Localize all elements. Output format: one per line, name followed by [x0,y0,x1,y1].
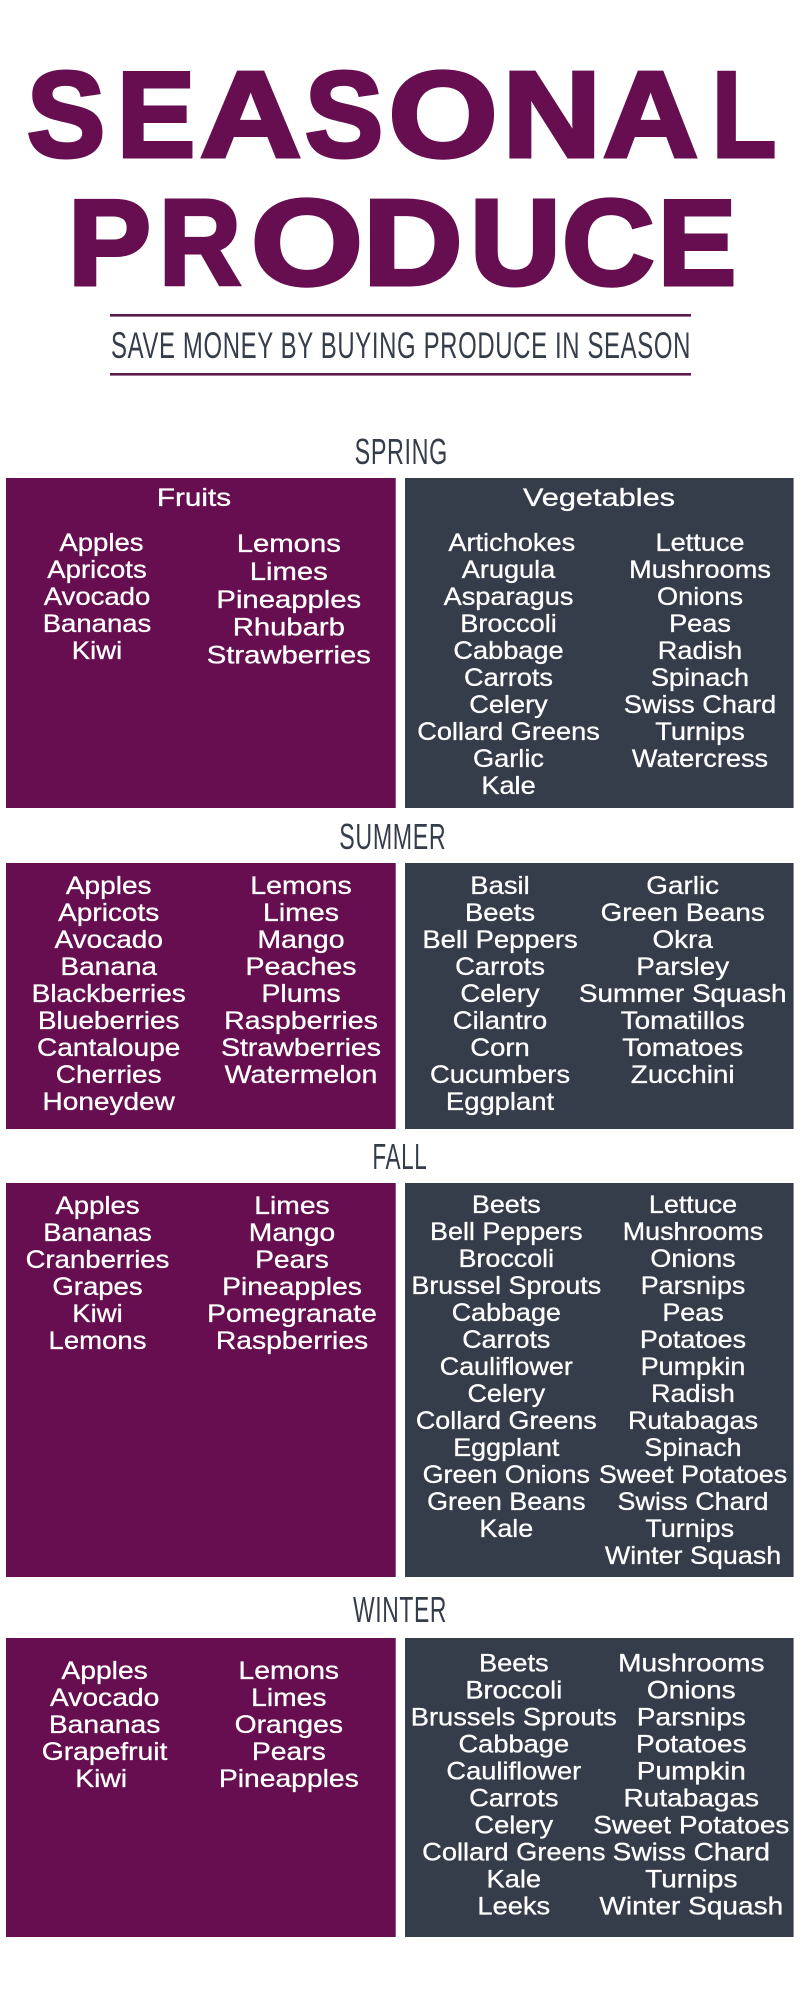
panel: fall fruits [6,1183,396,1577]
title: E [658,175,736,311]
panel: fall vegetables: Mushrooms [623,1219,763,1246]
panel: spring vegetables: Garlic [473,744,544,773]
panel: spring vegetables: Peas [669,609,731,638]
panel: fall vegetables: Eggplant [453,1435,559,1462]
panel: summer fruits: Honeydew [43,1088,176,1116]
panel: spring fruits: Bananas [43,609,151,638]
panel: spring vegetables: Mushrooms [629,555,771,584]
panel: fall vegetables: Parsnips [641,1273,745,1300]
panel: winter fruits: Bananas [49,1711,160,1739]
panel: fall vegetables: Potatoes [640,1327,746,1354]
panel: summer vegetables: Tomatillos [621,1006,745,1035]
panel: fall fruits: Pineapples [222,1273,362,1301]
panel: spring vegetables: Collard Greens [417,717,600,746]
panel: winter fruits: Pears [252,1738,326,1766]
panel: winter vegetables: Pumpkin [637,1757,746,1785]
heading: summer: SUMMER [339,816,446,857]
panel: summer fruits: Cherries [56,1061,162,1089]
panel: summer fruits: Mango [257,926,345,954]
title: O [388,46,498,182]
heading: spring: SPRING [355,431,448,472]
panel: fall vegetables: Rutabagas [628,1408,758,1435]
panel: winter vegetables: Potatoes [636,1730,747,1758]
panel: summer vegetables: Summer Squash [579,979,787,1008]
panel: fall fruits: Bananas [43,1218,152,1247]
panel: winter vegetables: Leeks [477,1892,550,1920]
panel: summer fruits: Avocado [54,926,163,954]
panel: spring vegetables: Asparagus [444,582,573,611]
panel: winter fruits: Limes [251,1684,326,1712]
panel: winter vegetables: Cabbage [458,1730,569,1758]
panel: winter fruits: Kiwi [75,1765,127,1793]
panel: winter vegetables: Celery [474,1811,553,1839]
title [27,46,776,311]
title: D [363,174,463,311]
panel: summer vegetables: Parsley [636,952,730,981]
title: L [712,47,776,183]
panel: spring fruits: Fruits [157,483,231,511]
panel: summer vegetables: Beets [465,898,535,927]
title: P [68,175,151,311]
title: U [470,175,561,311]
panel: spring fruits: Kiwi [72,636,122,665]
panel: fall fruits: Cranberries [26,1245,169,1274]
panel: fall fruits: Grapes [52,1272,143,1301]
panel: summer vegetables: Basil [470,871,530,900]
panel: winter fruits: Pineapples [219,1765,359,1793]
panel: winter vegetables: Kale [487,1865,541,1893]
panel: spring vegetables: Swiss Chard [624,690,776,719]
panel: summer vegetables: Carrots [455,952,545,981]
panel: fall vegetables: Radish [651,1381,735,1408]
panel: fall vegetables: Broccoli [458,1246,554,1273]
panel: fall vegetables: Bell Peppers [430,1219,583,1246]
title: O [251,175,363,311]
panel: winter fruits: Apples [61,1657,148,1685]
panel: spring fruits: Limes [250,557,328,585]
panel: summer vegetables: Zucchini [631,1060,735,1089]
panel: fall vegetables: Green Beans [427,1489,586,1516]
panel: fall vegetables: Peas [662,1300,724,1327]
panel: winter vegetables: Sweet Potatoes [593,1811,789,1839]
panel: winter vegetables: Rutabagas [624,1784,759,1812]
panel: fall vegetables: Pumpkin [641,1354,745,1381]
panel: fall vegetables: Spinach [644,1435,742,1462]
heading: fall: FALL [372,1136,427,1177]
panel: winter vegetables: Swiss Chard [613,1838,770,1866]
panel: summer fruits: Limes [263,899,339,927]
panel: winter vegetables: Winter Squash [599,1892,783,1920]
panel: spring vegetables: Kale [481,771,536,800]
panel: fall vegetables: Kale [479,1516,533,1543]
title: C [562,174,655,311]
panel: fall vegetables: Collard Greens [416,1408,597,1435]
panel: summer fruits: Peaches [246,953,356,981]
panel: spring vegetables [405,478,794,808]
panel: spring vegetables: Artichokes [448,528,575,557]
panel: spring vegetables: Watercress [632,744,768,773]
panel: fall vegetables: Winter Squash [605,1543,781,1570]
panel: summer vegetables: Green Beans [601,898,765,927]
panel: summer fruits: Raspberries [224,1007,378,1035]
panel: fall vegetables: Carrots [462,1327,550,1354]
title: E [117,47,195,183]
panel: fall fruits: Limes [254,1192,330,1220]
panel: fall vegetables: Cauliflower [440,1354,573,1381]
panel: spring vegetables: Onions [657,582,743,611]
panel: summer fruits: Blueberries [38,1007,180,1035]
panel: summer vegetables: Corn [470,1033,530,1062]
panel: summer vegetables: Cilantro [453,1006,547,1035]
panel: spring vegetables: Broccoli [460,609,557,638]
panel: winter vegetables [405,1638,794,1937]
panel: spring vegetables: Spinach [651,663,749,692]
panel: spring vegetables: Carrots [464,663,553,692]
panel: winter vegetables: Parsnips [637,1703,746,1731]
panel: summer fruits: Apples [66,872,152,900]
panel: fall vegetables: Onions [650,1246,736,1273]
panel: winter vegetables: Cauliflower [446,1757,582,1785]
panel: winter vegetables: Broccoli [465,1676,562,1704]
panel: fall vegetables: Celery [467,1381,545,1408]
panel: summer fruits: Plums [261,980,341,1008]
panel: summer fruits: Watermelon [225,1061,377,1089]
panel: spring vegetables: Turnips [655,717,745,746]
heading: winter: WINTER [353,1589,447,1630]
panel: spring fruits: Lemons [237,529,341,557]
title: A [200,46,301,182]
panel: fall vegetables: Lettuce [649,1192,737,1219]
panel: summer vegetables: Garlic [646,871,719,900]
title: A [603,46,698,182]
panel: fall fruits: Kiwi [72,1299,123,1328]
panel: spring vegetables: Vegetables [523,484,675,511]
panel: summer fruits: Apricots [58,899,159,927]
panel: summer vegetables: Bell Peppers [422,925,578,954]
panel: winter fruits: Avocado [50,1684,159,1712]
panel: summer fruits [6,863,396,1129]
panel: spring fruits: Strawberries [207,641,371,669]
panel: summer fruits: Lemons [250,872,352,900]
panel: spring vegetables: Radish [658,636,742,665]
panel: winter vegetables: Onions [647,1676,736,1704]
title: S [305,47,383,183]
panel: winter fruits: Lemons [239,1657,339,1685]
panel: summer fruits: Blackberries [32,980,186,1008]
panel: spring vegetables: Lettuce [655,528,745,557]
panel: spring vegetables: Cabbage [453,636,564,665]
panel: fall vegetables: Sweet Potatoes [599,1462,787,1489]
panel: winter fruits [6,1638,396,1937]
panel: winter vegetables: Collard Greens [422,1838,605,1866]
panel: fall vegetables: Green Onions [423,1462,590,1489]
panel: summer vegetables: Eggplant [446,1087,555,1116]
panel: fall vegetables: Beets [472,1192,541,1219]
panel: spring vegetables: Celery [469,690,548,719]
panel: fall fruits: Mango [249,1219,335,1247]
panel: spring fruits: Apricots [47,555,147,584]
panel: spring fruits: Apples [59,528,144,557]
panel: winter vegetables: Brussels Sprouts [411,1703,617,1731]
panel: summer fruits: Cantaloupe [37,1034,180,1062]
title: S [27,47,105,183]
panel: fall fruits: Pears [255,1246,329,1274]
panel: spring fruits [6,478,396,808]
panel: spring fruits: Rhubarb [233,613,345,641]
panel: summer vegetables: Okra [652,925,713,954]
title: N [502,47,601,183]
panel: summer vegetables: Celery [460,979,541,1008]
panel: winter vegetables: Turnips [645,1865,737,1893]
panel: summer vegetables: Cucumbers [430,1060,570,1089]
panel: fall vegetables: Swiss Chard [618,1489,768,1516]
panel: winter vegetables: Beets [479,1649,549,1677]
panel: winter fruits: Oranges [235,1711,343,1739]
panel: fall vegetables: Turnips [645,1516,734,1543]
panel: summer vegetables: Tomatoes [622,1033,743,1062]
panel: fall fruits: Pomegranate [207,1300,377,1328]
panel: fall fruits: Lemons [49,1326,146,1355]
panel: fall vegetables [405,1183,794,1577]
panel: spring vegetables: Arugula [462,555,556,584]
panel: fall vegetables: Cabbage [452,1300,561,1327]
panel: summer fruits: Strawberries [221,1034,381,1062]
panel: spring fruits: Pineapples [216,585,361,613]
panel: winter vegetables: Mushrooms [618,1649,764,1677]
panel: winter vegetables: Carrots [469,1784,558,1812]
panel: fall vegetables: Brussel Sprouts [411,1273,601,1300]
panel: winter fruits: Grapefruit [42,1738,168,1766]
panel: fall fruits: Apples [55,1191,140,1220]
panel: spring fruits: Avocado [44,582,150,611]
panel: summer vegetables [405,863,794,1129]
panel: fall fruits: Raspberries [216,1327,368,1355]
panel: summer fruits: Banana [60,953,157,981]
title: R [159,174,241,310]
